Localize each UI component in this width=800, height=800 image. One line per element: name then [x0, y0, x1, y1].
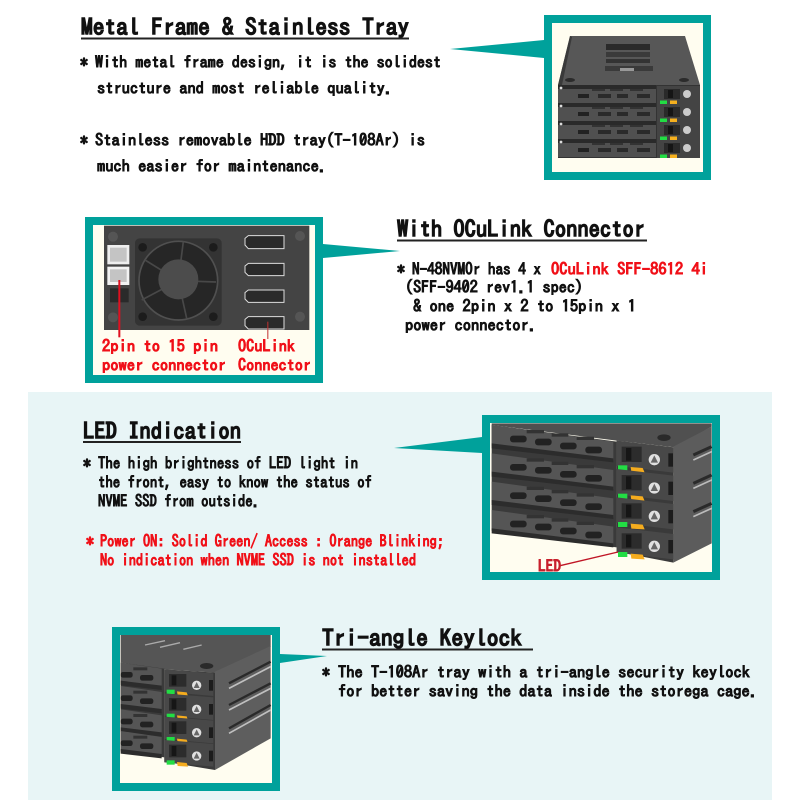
text block: OCuLink bullets: & one 2pin x 2 to 15pin x 1 [413, 298, 636, 315]
panel: connector photo [85, 217, 323, 383]
icon: enclosure front with LEDs [492, 423, 712, 566]
text block: LED bullets: NVME SSD from outside. [98, 493, 260, 509]
arrow: pointer to connector photo [323, 244, 400, 258]
icon: enclosure product top view [558, 36, 700, 158]
text block: metal frame bullets: * [80, 132, 88, 148]
arrow: pointer to metal frame photo [450, 40, 544, 58]
text block: metal frame bullets: Stainless removable HDD tray(T-108Ar) is [95, 131, 425, 149]
text block: LED status note: No indication when NVME SSD is not installed [100, 552, 416, 568]
panel: LED photo [482, 415, 720, 580]
arrow: pointer to keylock photo [280, 654, 327, 663]
text block: keylock bullets: * [322, 664, 330, 680]
panel: light background section [28, 392, 772, 800]
text block: metal frame bullets: * [80, 54, 88, 70]
text block: metal frame bullets: With metal frame design, it is the solidest [95, 54, 441, 71]
text block: metal frame bullets [80, 54, 441, 174]
heading: tri-angle keylock: Tri-angle Keylock [322, 626, 523, 649]
heading: LED indication: LED Indication [83, 419, 241, 442]
panel: metal frame photo [544, 15, 711, 180]
LED label: LED [538, 558, 561, 574]
connector labels: 2pin to 15 pin [102, 338, 218, 355]
connector labels: Connector [238, 357, 311, 373]
text block: OCuLink bullets: (SFF-9402 rev1.1 spec) [405, 278, 583, 296]
panel: keylock photo [112, 627, 280, 791]
text block: OCuLink bullets: * [397, 261, 405, 277]
connector labels: OCuLink [238, 338, 295, 354]
text block: LED bullets [83, 455, 372, 509]
text block: LED status note [86, 533, 444, 568]
text block: metal frame bullets: structure and most reliable quality. [97, 80, 393, 97]
arrow: pointer to LED photo [394, 437, 482, 453]
text block: OCuLink bullets [397, 261, 708, 334]
text block: OCuLink bullets: N-48NVMOr has 4 x [412, 261, 541, 277]
text block: keylock bullets: for better saving the data inside the storega cage. [338, 683, 758, 700]
heading: OCuLink connector: With OCuLink Connector [397, 217, 645, 240]
title: metal frame: Metal Frame & Stainless Tray [81, 15, 410, 38]
text block: LED status note: Power ON: Solid Green/ Access : Orange Blinking; [100, 533, 444, 550]
text block: metal frame bullets: much easier for maintenance. [97, 158, 327, 174]
text block: keylock bullets [322, 664, 758, 700]
text block: OCuLink bullets: power connector. [405, 317, 537, 334]
text block: OCuLink bullets: OCuLink SFF-8612 4i [551, 261, 708, 277]
icon: rear view with fan and connectors [104, 226, 309, 339]
text block: LED bullets: the front, easy to know the status of [98, 474, 372, 491]
connector labels: power connector [102, 357, 226, 374]
text block: LED bullets: * [83, 455, 91, 471]
icon: enclosure with keylock [121, 635, 271, 770]
connector labels [102, 338, 311, 374]
text block: LED status note: * [86, 533, 94, 549]
text block: LED bullets: The high brightness of LED light in [98, 455, 358, 472]
text block: keylock bullets: The T-108Ar tray with a tri-angle security keylock [338, 664, 750, 681]
